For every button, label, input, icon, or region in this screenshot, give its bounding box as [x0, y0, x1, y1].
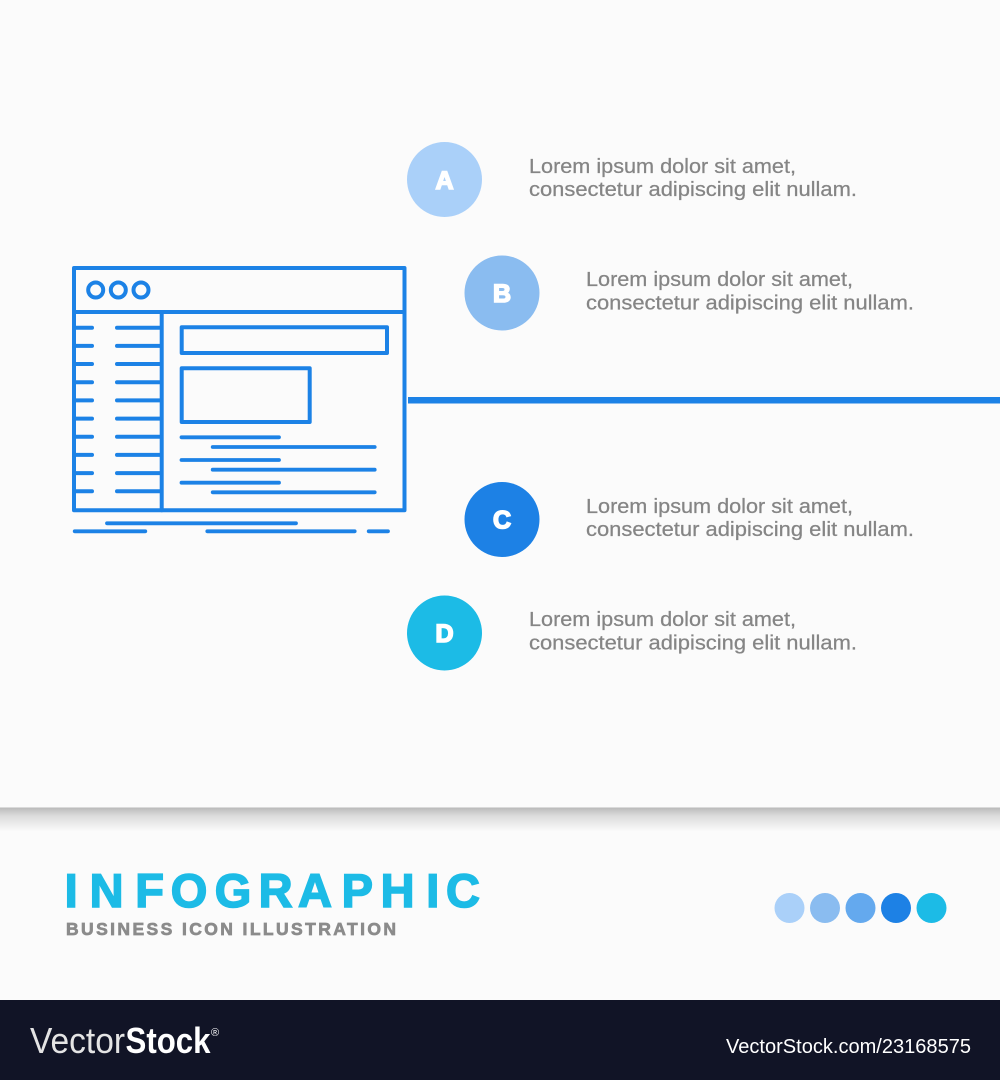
- step D: [407, 596, 857, 670]
- watermark footer bar: ®: [211, 1027, 219, 1039]
- step D: Lorem ipsum dolor sit amet,: [529, 609, 796, 631]
- step C: C: [493, 506, 511, 534]
- step B: Lorem ipsum dolor sit amet,: [586, 269, 853, 291]
- step A: A: [435, 167, 454, 195]
- panel shadow divider: [0, 808, 1000, 832]
- watermark footer bar: [0, 1000, 1000, 1080]
- step A: Lorem ipsum dolor sit amet,: [529, 156, 796, 178]
- step D: consectetur adipiscing elit nullam.: [529, 632, 857, 654]
- step A: consectetur adipiscing elit nullam.: [529, 179, 857, 201]
- step C: [464, 482, 914, 557]
- step C: consectetur adipiscing elit nullam.: [586, 519, 914, 541]
- step A: [407, 142, 857, 217]
- step C: Lorem ipsum dolor sit amet,: [586, 496, 853, 518]
- title: INFOGRAPHIC: [65, 864, 480, 917]
- subtitle: BUSINESS ICON ILLUSTRATION: [66, 919, 396, 939]
- step B: [464, 256, 914, 330]
- pagination dots: [774, 893, 946, 923]
- watermark footer bar: Vector: [30, 1020, 125, 1061]
- watermark footer bar: VectorStock.com/23168575: [726, 1036, 971, 1058]
- icon: website browser window: [74, 268, 404, 531]
- watermark footer bar: Stock: [126, 1020, 211, 1061]
- step D: D: [435, 620, 454, 648]
- step B: B: [493, 280, 511, 308]
- connector line: [408, 397, 1000, 404]
- step B: consectetur adipiscing elit nullam.: [586, 292, 914, 314]
